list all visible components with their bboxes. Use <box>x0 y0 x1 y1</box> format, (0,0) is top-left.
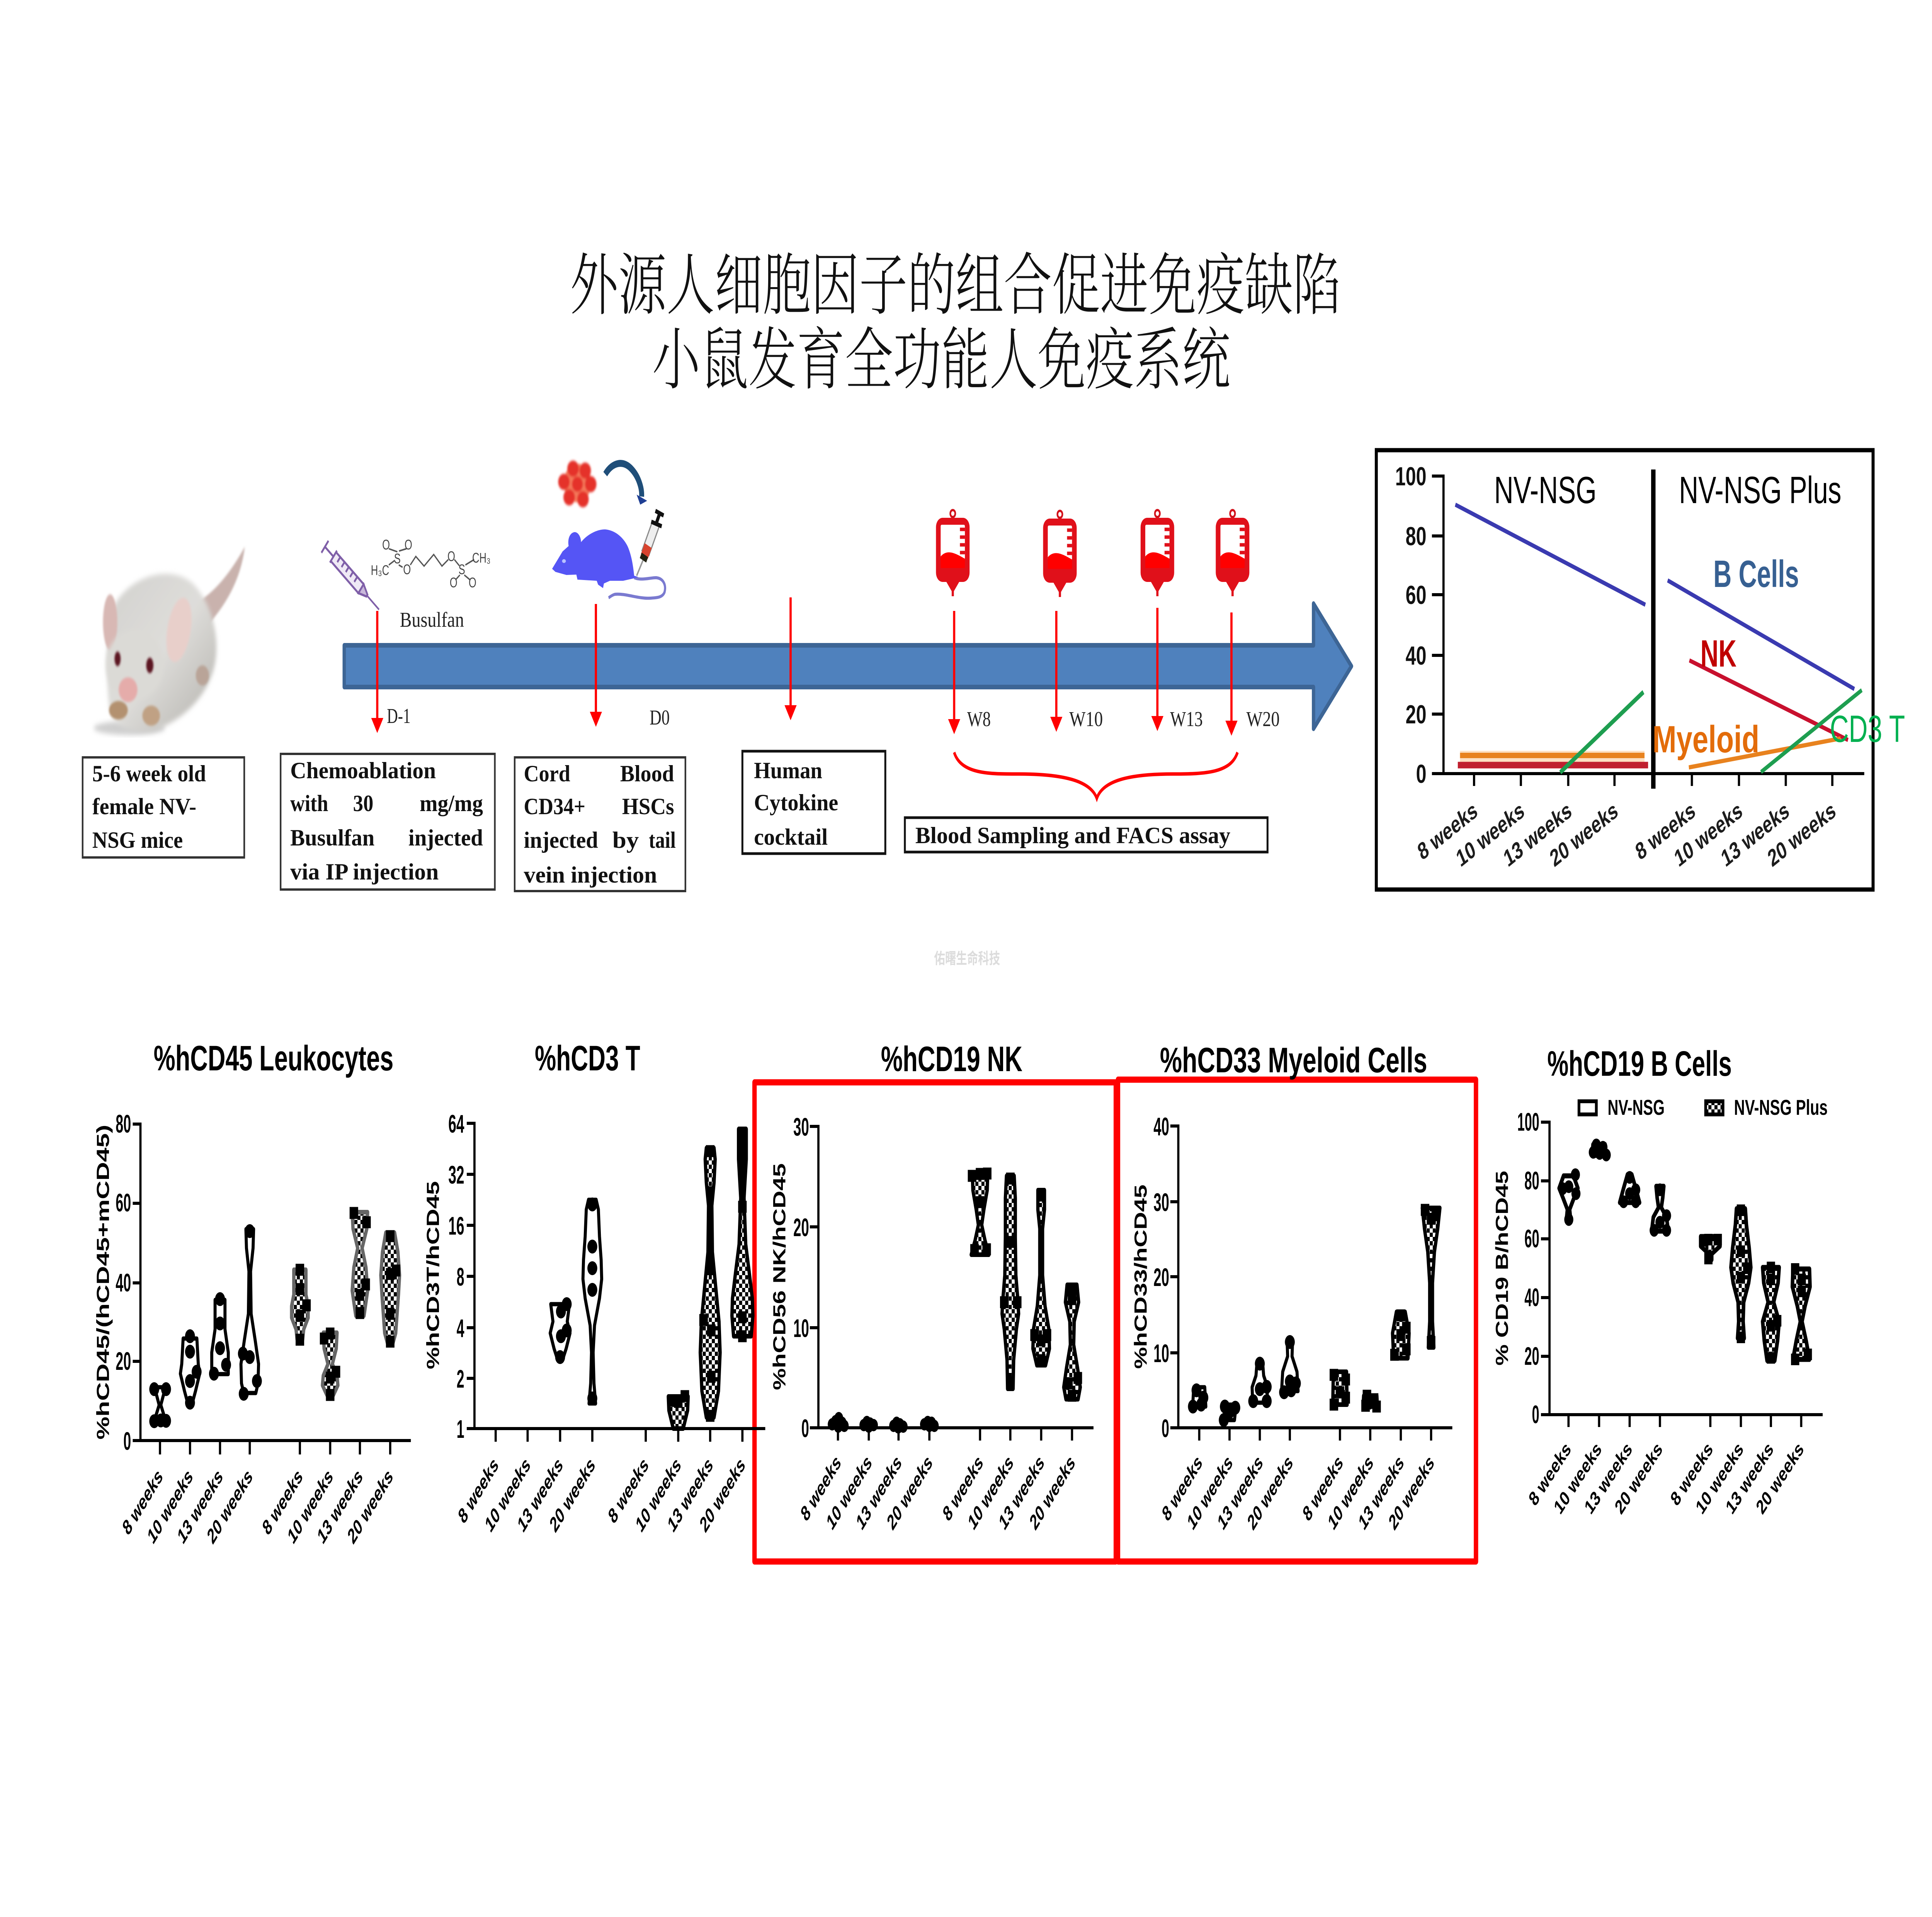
timeline labels: W8 <box>967 708 991 731</box>
y tick labels: 0 <box>123 1427 131 1456</box>
timeline labels: W13 <box>1170 708 1203 731</box>
y tick labels: 0 <box>801 1414 809 1443</box>
summary x labels <box>1414 796 1839 872</box>
panel: cytokine box: cocktail <box>754 825 828 850</box>
axis title: %hCD45/(hCD45+mCD45) <box>93 1125 113 1439</box>
NV-NSG Plus violins <box>292 1212 400 1395</box>
x tick labels: 10 weeks <box>481 1454 534 1536</box>
summary annotations: NV-NSG Plus <box>1679 469 1842 512</box>
axes <box>1541 1121 1823 1427</box>
x tick labels: 8 weeks <box>1158 1451 1206 1525</box>
arrow: W8 <box>948 611 960 734</box>
x tick labels <box>119 1465 396 1548</box>
summary x labels: 10 weeks <box>1453 796 1527 872</box>
summary axes <box>1432 475 1864 786</box>
axis title: %hCD3T/hCD45 <box>423 1181 443 1369</box>
summary x labels: 20 weeks <box>1764 796 1839 872</box>
icon: busulfan syringe <box>321 541 383 616</box>
y tick labels: 20 <box>793 1213 809 1242</box>
x tick labels: 13 weeks <box>664 1454 716 1536</box>
timeline labels: W10 <box>1069 708 1103 731</box>
x tick labels: 13 weeks <box>1581 1437 1635 1518</box>
chart: hCD19 B cells <box>1492 1044 1828 1518</box>
x tick labels: 8 weeks <box>1526 1437 1574 1510</box>
x tick labels: 10 weeks <box>823 1451 875 1533</box>
summary x labels: 8 weeks <box>1632 796 1699 866</box>
panel: mouse strain box: 5-6 week old <box>92 761 206 787</box>
panel: cytokine box: Cytokine <box>754 790 838 816</box>
icon: curved transfer arrow <box>605 463 647 505</box>
icon: busulfan chemical structure: O <box>403 562 411 577</box>
x tick labels <box>454 1454 749 1536</box>
icon: blood bag W13 <box>1141 510 1174 596</box>
timeline labels: D-1 <box>387 704 411 728</box>
timeline arrow <box>344 604 1352 729</box>
y tick labels <box>1153 1112 1169 1443</box>
x tick labels: 13 weeks <box>1723 1437 1777 1518</box>
timeline labels: D0 <box>650 706 670 730</box>
arrow: W13 <box>1151 608 1163 731</box>
NV-NSG violins <box>154 1229 259 1422</box>
chart: hCD3 T <box>423 1038 765 1536</box>
heading: %hCD33 Myeloid Cells <box>1160 1040 1427 1080</box>
panel: chemoablation box: 30 <box>353 791 373 816</box>
arrow: D0 <box>590 604 602 727</box>
axis title: %hCD56 NK/hCD45 <box>769 1163 789 1390</box>
x tick labels: 20 weeks <box>1384 1451 1438 1534</box>
heading: %hCD45 Leukocytes <box>154 1038 393 1078</box>
y tick labels: 20 <box>116 1347 131 1376</box>
panel: cord blood box: Blood <box>620 761 674 787</box>
x tick labels: 13 weeks <box>313 1465 366 1547</box>
icon: cell cluster <box>558 461 597 507</box>
y tick labels: 40 <box>1153 1112 1169 1141</box>
y tick labels: 1 <box>457 1415 464 1444</box>
icon: busulfan chemical structure: H₃C <box>371 563 389 578</box>
panel: mouse strain box: NSG mice <box>92 828 183 853</box>
panel: chemoablation box: with <box>290 791 328 816</box>
watermark: 佑曙生命科技 <box>934 946 1000 969</box>
chart: hCD33 myeloid <box>1131 1040 1452 1534</box>
y tick labels: 20 <box>1153 1263 1169 1292</box>
y tick labels: 40 <box>116 1269 131 1297</box>
x tick labels: 8 weeks <box>1299 1451 1347 1525</box>
y tick labels: 0 <box>1532 1400 1539 1429</box>
y tick labels: 30 <box>793 1113 809 1141</box>
x tick labels: 10 weeks <box>1692 1437 1747 1518</box>
x tick labels: 20 weeks <box>696 1454 749 1536</box>
label: Busulfan: Busulfan <box>400 608 464 632</box>
x tick labels: 10 weeks <box>1551 1437 1605 1518</box>
brace <box>954 752 1238 798</box>
timeline labels: W20 <box>1246 708 1280 731</box>
panel: cytokine box: Human <box>754 758 822 784</box>
summary x labels: 8 weeks <box>1414 796 1481 866</box>
panel: blood sampling box <box>905 818 1267 852</box>
x tick labels <box>797 1451 1078 1534</box>
NV-NSG Plus violins <box>1333 1208 1440 1407</box>
axes <box>810 1125 1094 1441</box>
arrow: W10 <box>1050 611 1062 732</box>
x tick labels: 10 weeks <box>143 1465 196 1547</box>
y tick labels: 16 <box>448 1212 464 1240</box>
y tick labels <box>1517 1108 1539 1429</box>
icon: blood bag W8 <box>936 510 969 596</box>
x tick labels: 20 weeks <box>1612 1437 1666 1518</box>
axis title: %hCD33/hCD45 <box>1131 1185 1150 1369</box>
title: 外源人细胞因子的组合促进免疫缺陷 <box>570 231 1341 328</box>
arrow: D-1 <box>371 611 383 733</box>
NV-NSG Plus violins <box>668 1129 753 1429</box>
summary y labels: 100 <box>1395 462 1427 491</box>
axes <box>133 1123 411 1454</box>
panel: cord blood box <box>515 757 685 891</box>
y tick labels: 20 <box>1524 1342 1539 1371</box>
x tick labels: 20 weeks <box>546 1454 599 1536</box>
panel: red highlight NK <box>755 1082 1116 1561</box>
y tick labels: 40 <box>1524 1283 1539 1312</box>
panel: chemoablation box: injected <box>408 825 483 851</box>
title <box>570 231 1341 403</box>
panel: cord blood box: CD34+ <box>524 794 585 820</box>
x tick labels: 20 weeks <box>1243 1451 1296 1534</box>
y tick labels: 4 <box>457 1314 464 1343</box>
NV-NSG violins <box>1559 1145 1668 1231</box>
panel: chemoablation box: Chemoablation <box>290 758 436 784</box>
y tick labels: 80 <box>1524 1167 1539 1195</box>
y tick labels: 60 <box>116 1189 131 1217</box>
x tick labels: 20 weeks <box>203 1465 256 1548</box>
y tick labels: 100 <box>1517 1108 1539 1136</box>
x tick labels: 13 weeks <box>852 1451 905 1533</box>
x tick labels: 8 weeks <box>1667 1437 1716 1510</box>
y tick labels: 0 <box>1162 1414 1169 1443</box>
summary x labels: 20 weeks <box>1547 796 1621 872</box>
summary y labels: 40 <box>1406 641 1427 670</box>
summary x labels: 10 weeks <box>1671 796 1745 872</box>
panel: chemoablation box: via IP injection <box>290 859 439 885</box>
summary annotations: CD3 T <box>1830 708 1905 750</box>
y tick labels: 30 <box>1153 1188 1169 1217</box>
panel: cord blood box: Cord <box>524 761 570 787</box>
x tick labels: 8 weeks <box>259 1465 306 1539</box>
icon: blue mouse with syringe <box>552 511 665 598</box>
y tick labels: 10 <box>1153 1339 1169 1368</box>
x tick labels <box>1526 1437 1807 1518</box>
x tick labels: 20 weeks <box>883 1451 936 1534</box>
icon: busulfan chemical structure: O <box>405 537 412 553</box>
summary annotations: Myeloid <box>1653 718 1759 761</box>
x tick labels: 10 weeks <box>1183 1451 1236 1533</box>
y tick labels <box>448 1110 464 1444</box>
x tick labels: 13 weeks <box>1214 1451 1266 1533</box>
summary divider <box>1650 469 1656 789</box>
x tick labels: 8 weeks <box>939 1451 986 1525</box>
x tick labels: 8 weeks <box>454 1454 502 1527</box>
x tick labels: 8 weeks <box>797 1451 845 1525</box>
NV-NSG dot clusters <box>832 1418 934 1427</box>
panel: cytokine box <box>742 751 885 854</box>
summary trend lines <box>1455 505 1862 772</box>
NV-NSG violins <box>1193 1340 1298 1420</box>
panel: red highlight myeloid <box>1118 1080 1476 1561</box>
summary y labels <box>1395 462 1427 789</box>
icon: blood bag W10 <box>1043 511 1077 597</box>
panel: mouse strain box <box>83 757 244 857</box>
title: 小鼠发育全功能人免疫系统 <box>652 306 1230 403</box>
icon: busulfan chemical structure: O <box>382 537 390 553</box>
panel: blood sampling box: Blood Sampling and FACS assay <box>915 823 1230 849</box>
icon: white mouse photo <box>94 547 245 735</box>
y tick labels: 10 <box>793 1314 809 1343</box>
x tick labels: 20 weeks <box>344 1465 396 1548</box>
summary y labels: 0 <box>1416 759 1427 789</box>
y tick labels <box>116 1110 131 1456</box>
summary annotations: NK <box>1701 633 1736 675</box>
y tick labels <box>793 1113 809 1443</box>
x tick labels: 10 weeks <box>964 1451 1017 1533</box>
x tick labels: 8 weeks <box>604 1454 652 1527</box>
arrow: W20 <box>1225 612 1238 736</box>
panel: summary trend chart <box>1376 450 1905 890</box>
NV-NSG violins <box>550 1200 602 1403</box>
axis title: % CD19 B/hCD45 <box>1492 1171 1512 1366</box>
arrow: cytokine <box>784 597 797 720</box>
axes <box>467 1122 765 1442</box>
y tick labels: 32 <box>448 1161 464 1189</box>
summary y labels: 20 <box>1406 700 1427 729</box>
summary annotations <box>1494 469 1905 761</box>
timeline labels <box>387 704 1280 731</box>
chart: hCD56 NK <box>769 1039 1094 1534</box>
icon: busulfan chemical structure: S <box>394 551 401 566</box>
panel: chemoablation box: Busulfan <box>290 825 374 851</box>
NV-NSG Plus violins <box>1701 1209 1810 1361</box>
panel: mouse strain box: female NV- <box>92 794 196 820</box>
panel: cord blood box: tail <box>649 828 676 853</box>
y tick labels: 80 <box>116 1110 131 1138</box>
x tick labels: 10 weeks <box>632 1454 685 1536</box>
axes <box>1170 1124 1452 1441</box>
legend <box>1579 1095 1828 1120</box>
icon: busulfan chemical structure: CH₃ <box>472 550 490 566</box>
icon: busulfan chemical structure: O <box>450 575 457 590</box>
summary x labels: 13 weeks <box>1718 796 1793 872</box>
NV-NSG Plus violins <box>971 1172 1080 1399</box>
summary y labels: 60 <box>1406 580 1427 610</box>
chart: hCD45 leukocytes <box>93 1038 411 1548</box>
y tick labels: 64 <box>448 1110 464 1138</box>
heading: %hCD3 T <box>535 1038 640 1078</box>
summary y labels: 80 <box>1406 522 1427 551</box>
heading: %hCD19 NK <box>881 1039 1022 1079</box>
panel: cord blood box: HSCs <box>622 794 674 820</box>
icon: busulfan chemical structure <box>371 537 490 590</box>
y tick labels: 8 <box>457 1263 464 1291</box>
icon: busulfan chemical structure: S <box>459 562 465 577</box>
icon: blood bag W20 <box>1216 510 1249 596</box>
icon: busulfan chemical structure: O <box>447 549 455 564</box>
heading: %hCD19 B Cells <box>1547 1044 1732 1084</box>
x tick labels: 8 weeks <box>119 1465 166 1539</box>
y tick labels: 2 <box>457 1365 464 1393</box>
x tick labels: 13 weeks <box>1355 1451 1407 1533</box>
icon: busulfan chemical structure: O <box>469 575 476 590</box>
x tick labels: 13 weeks <box>995 1451 1048 1533</box>
panel: cord blood box: injected <box>524 828 598 853</box>
summary x labels: 13 weeks <box>1500 796 1575 872</box>
panel: chemoablation box: mg/mg <box>420 791 483 816</box>
y tick labels: 60 <box>1524 1225 1539 1253</box>
x tick labels <box>1158 1451 1438 1534</box>
x tick labels: 10 weeks <box>1324 1451 1377 1533</box>
x tick labels: 13 weeks <box>514 1454 566 1536</box>
panel: cord blood box: vein injection <box>524 862 657 888</box>
x tick labels: 13 weeks <box>173 1465 226 1547</box>
panel: cord blood box: by <box>612 828 639 853</box>
x tick labels: 20 weeks <box>1753 1437 1807 1518</box>
legend: NV-NSG Plus <box>1734 1095 1828 1120</box>
summary annotations: NV-NSG <box>1494 469 1597 512</box>
x tick labels: 10 weeks <box>284 1465 337 1547</box>
x tick labels: 20 weeks <box>1026 1451 1078 1534</box>
panel: chemoablation box <box>281 754 495 890</box>
legend: NV-NSG <box>1607 1095 1665 1120</box>
summary annotations: B Cells <box>1713 553 1799 595</box>
